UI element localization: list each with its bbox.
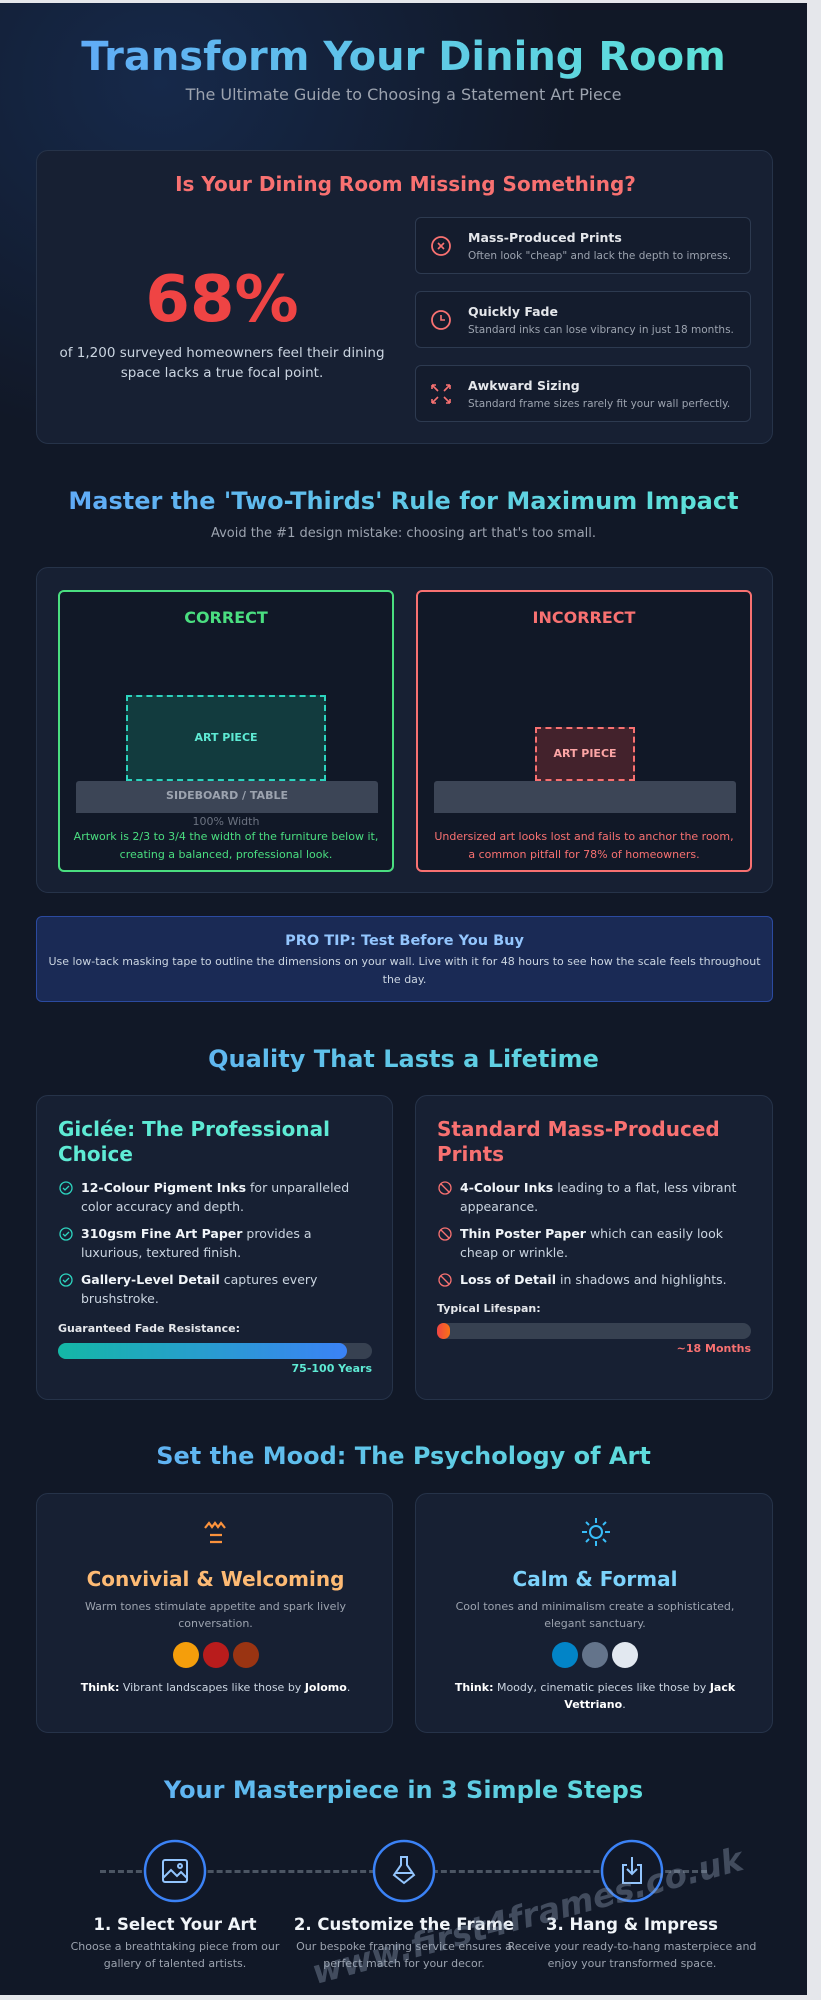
section heading: mood xyxy=(0,1442,807,1470)
item: mass-produced: Mass-Produced Prints xyxy=(468,230,622,245)
bar: lifespan: ~18 Months xyxy=(677,1342,751,1355)
description xyxy=(434,830,734,861)
dashed connector xyxy=(100,1870,707,1873)
heading: Standard Mass-Produced xyxy=(437,1117,720,1141)
heading: Giclée: The Professional xyxy=(58,1117,330,1141)
art piece (small): ART PIECE xyxy=(553,747,617,760)
step 3: Receive your ready-to-hang masterpiece and enjoy your transformed space. xyxy=(508,1940,756,1970)
description: Undersized art looks lost and fails to anchor the room, xyxy=(434,830,734,843)
incorrect box: INCORRECT xyxy=(533,608,635,627)
sideboard: SIDEBOARD / TABLE xyxy=(166,789,288,802)
item: awkward sizing: Awkward Sizing xyxy=(468,378,580,393)
heading: Convivial & Welcoming xyxy=(87,1567,344,1591)
correct box xyxy=(58,590,394,872)
section heading: mood: Set the Mood: The Psychology of Art xyxy=(156,1442,651,1470)
panel: mass produced: Loss of Detail in shadows and highlights. xyxy=(460,1272,727,1287)
stat 68%: of 1,200 surveyed homeowners feel their dining xyxy=(59,345,385,361)
panel: calm: Cool tones and minimalism create a sophisticated, elegant sanctuary. xyxy=(456,1600,734,1630)
watermark: www.first4frames.co.uk xyxy=(308,1839,747,1992)
item: quickly fade: Quickly Fade xyxy=(468,304,558,319)
section heading: steps: Your Masterpiece in 3 Simple Steps xyxy=(164,1776,643,1804)
bar: lifespan xyxy=(437,1302,751,1355)
section heading: steps xyxy=(0,1776,807,1804)
art piece (large) xyxy=(126,695,326,781)
swatches xyxy=(552,1642,638,1668)
section heading: quality: Quality That Lasts a Lifetime xyxy=(208,1045,599,1073)
description: Artwork is 2/3 to 3/4 the width of the furniture below it, xyxy=(74,830,378,843)
art piece (small) xyxy=(535,727,635,781)
icon: clock xyxy=(431,310,451,330)
description: a common pitfall for 78% of homeowners. xyxy=(468,848,700,861)
art piece (large): ART PIECE xyxy=(194,731,258,744)
heading: Prints xyxy=(437,1142,504,1166)
description: creating a balanced, professional look. xyxy=(120,848,332,861)
callout: pro tip: the day. xyxy=(383,973,426,986)
item: mass-produced xyxy=(415,217,751,274)
stat 68%: space lacks a true focal point. xyxy=(121,365,323,381)
panel: calm xyxy=(415,1493,773,1733)
panel: mass produced xyxy=(415,1095,773,1400)
panel: convivial: Warm tones stimulate appetite and spark lively conversation. xyxy=(85,1600,346,1630)
item: quickly fade xyxy=(415,291,751,348)
sideboard xyxy=(434,781,736,813)
step 2 xyxy=(294,1840,514,1970)
callout: pro tip: Use low-tack masking tape to outline the dimensions on your wall. Live with it for 48 hours to see how the scale feels throughout xyxy=(48,955,761,968)
panel: mass produced: Thin Poster Paper which can easily look cheap or wrinkle. xyxy=(460,1226,723,1260)
panel: giclee: 310gsm Fine Art Paper provides a luxurious, textured finish. xyxy=(81,1226,312,1260)
step 3 xyxy=(508,1840,756,1970)
heading: Choice xyxy=(58,1142,133,1166)
panel: giclee: Gallery-Level Detail captures every brushstroke. xyxy=(81,1272,317,1306)
icon: arrows xyxy=(431,384,451,404)
panel: convivial xyxy=(36,1493,393,1733)
icon: download xyxy=(600,1840,664,1902)
panel: giclee xyxy=(36,1095,393,1400)
sideboard xyxy=(76,781,378,813)
icon: flask xyxy=(372,1840,436,1902)
heading xyxy=(58,1117,330,1166)
list: 4-Colour Inks leading to a flat, less vibrant appearance. xyxy=(460,1180,736,1214)
bar: fade resistance: 75-100 Years xyxy=(292,1362,372,1375)
panel: calm: Think: Moody, cinematic pieces like those by Jack Vettriano. xyxy=(455,1681,735,1711)
icon: sun xyxy=(582,1518,610,1546)
stat 68% xyxy=(59,263,385,381)
step 1: 1. Select Your Art xyxy=(93,1915,257,1934)
panel: missing something xyxy=(36,150,773,444)
step 1: Choose a breathtaking piece from our gallery of talented artists. xyxy=(71,1940,279,1970)
list: 12-Colour Pigment Inks for unparalleled color accuracy and depth. xyxy=(81,1180,349,1214)
subtitle: The Ultimate Guide to Choosing a Statement Art Piece xyxy=(186,85,621,104)
swatches xyxy=(173,1642,259,1668)
item: awkward sizing xyxy=(415,365,751,422)
correct box: CORRECT xyxy=(184,608,268,627)
callout: pro tip xyxy=(36,916,773,1002)
heading: Calm & Formal xyxy=(513,1567,677,1591)
description xyxy=(74,830,378,861)
step 1 xyxy=(71,1840,280,1970)
callout: pro tip: PRO TIP: Test Before You Buy xyxy=(285,933,524,949)
bar: lifespan: Typical Lifespan: xyxy=(437,1302,541,1315)
icon: image xyxy=(144,1840,206,1902)
step 3: 3. Hang & Impress xyxy=(546,1915,718,1934)
section heading: two-thirds: Master the 'Two-Thirds' Rule for Maximum Impact xyxy=(68,487,739,515)
panel: two-thirds comparison xyxy=(36,567,773,893)
panel: convivial: Think: Vibrant landscapes like those by Jolomo. xyxy=(81,1681,350,1694)
title: Transform Your Dining Room xyxy=(81,34,726,80)
bar: fade resistance: Guaranteed Fade Resistance: xyxy=(58,1322,240,1335)
step 2: Our bespoke framing service ensures a perfect match for your decor. xyxy=(296,1940,512,1970)
stat 68%: 68% xyxy=(145,263,299,337)
item: quickly fade: Standard inks can lose vibrancy in just 18 months. xyxy=(468,324,734,336)
icon: x circle xyxy=(431,236,451,256)
step 2: 2. Customize the Frame xyxy=(294,1915,514,1934)
heading xyxy=(437,1117,720,1166)
item: awkward sizing: Standard frame sizes rarely fit your wall perfectly. xyxy=(468,398,730,410)
item: mass-produced: Often look "cheap" and lack the depth to impress. xyxy=(468,250,731,262)
bar: fade resistance xyxy=(58,1322,372,1375)
correct box: 100% Width xyxy=(193,815,259,828)
incorrect box xyxy=(416,590,752,872)
section subtitle: Avoid the #1 design mistake: choosing art that's too small. xyxy=(211,526,596,541)
section heading: quality xyxy=(0,1045,807,1073)
heading: Is Your Dining Room Missing Something? xyxy=(175,172,636,196)
icon: warm xyxy=(204,1521,226,1544)
